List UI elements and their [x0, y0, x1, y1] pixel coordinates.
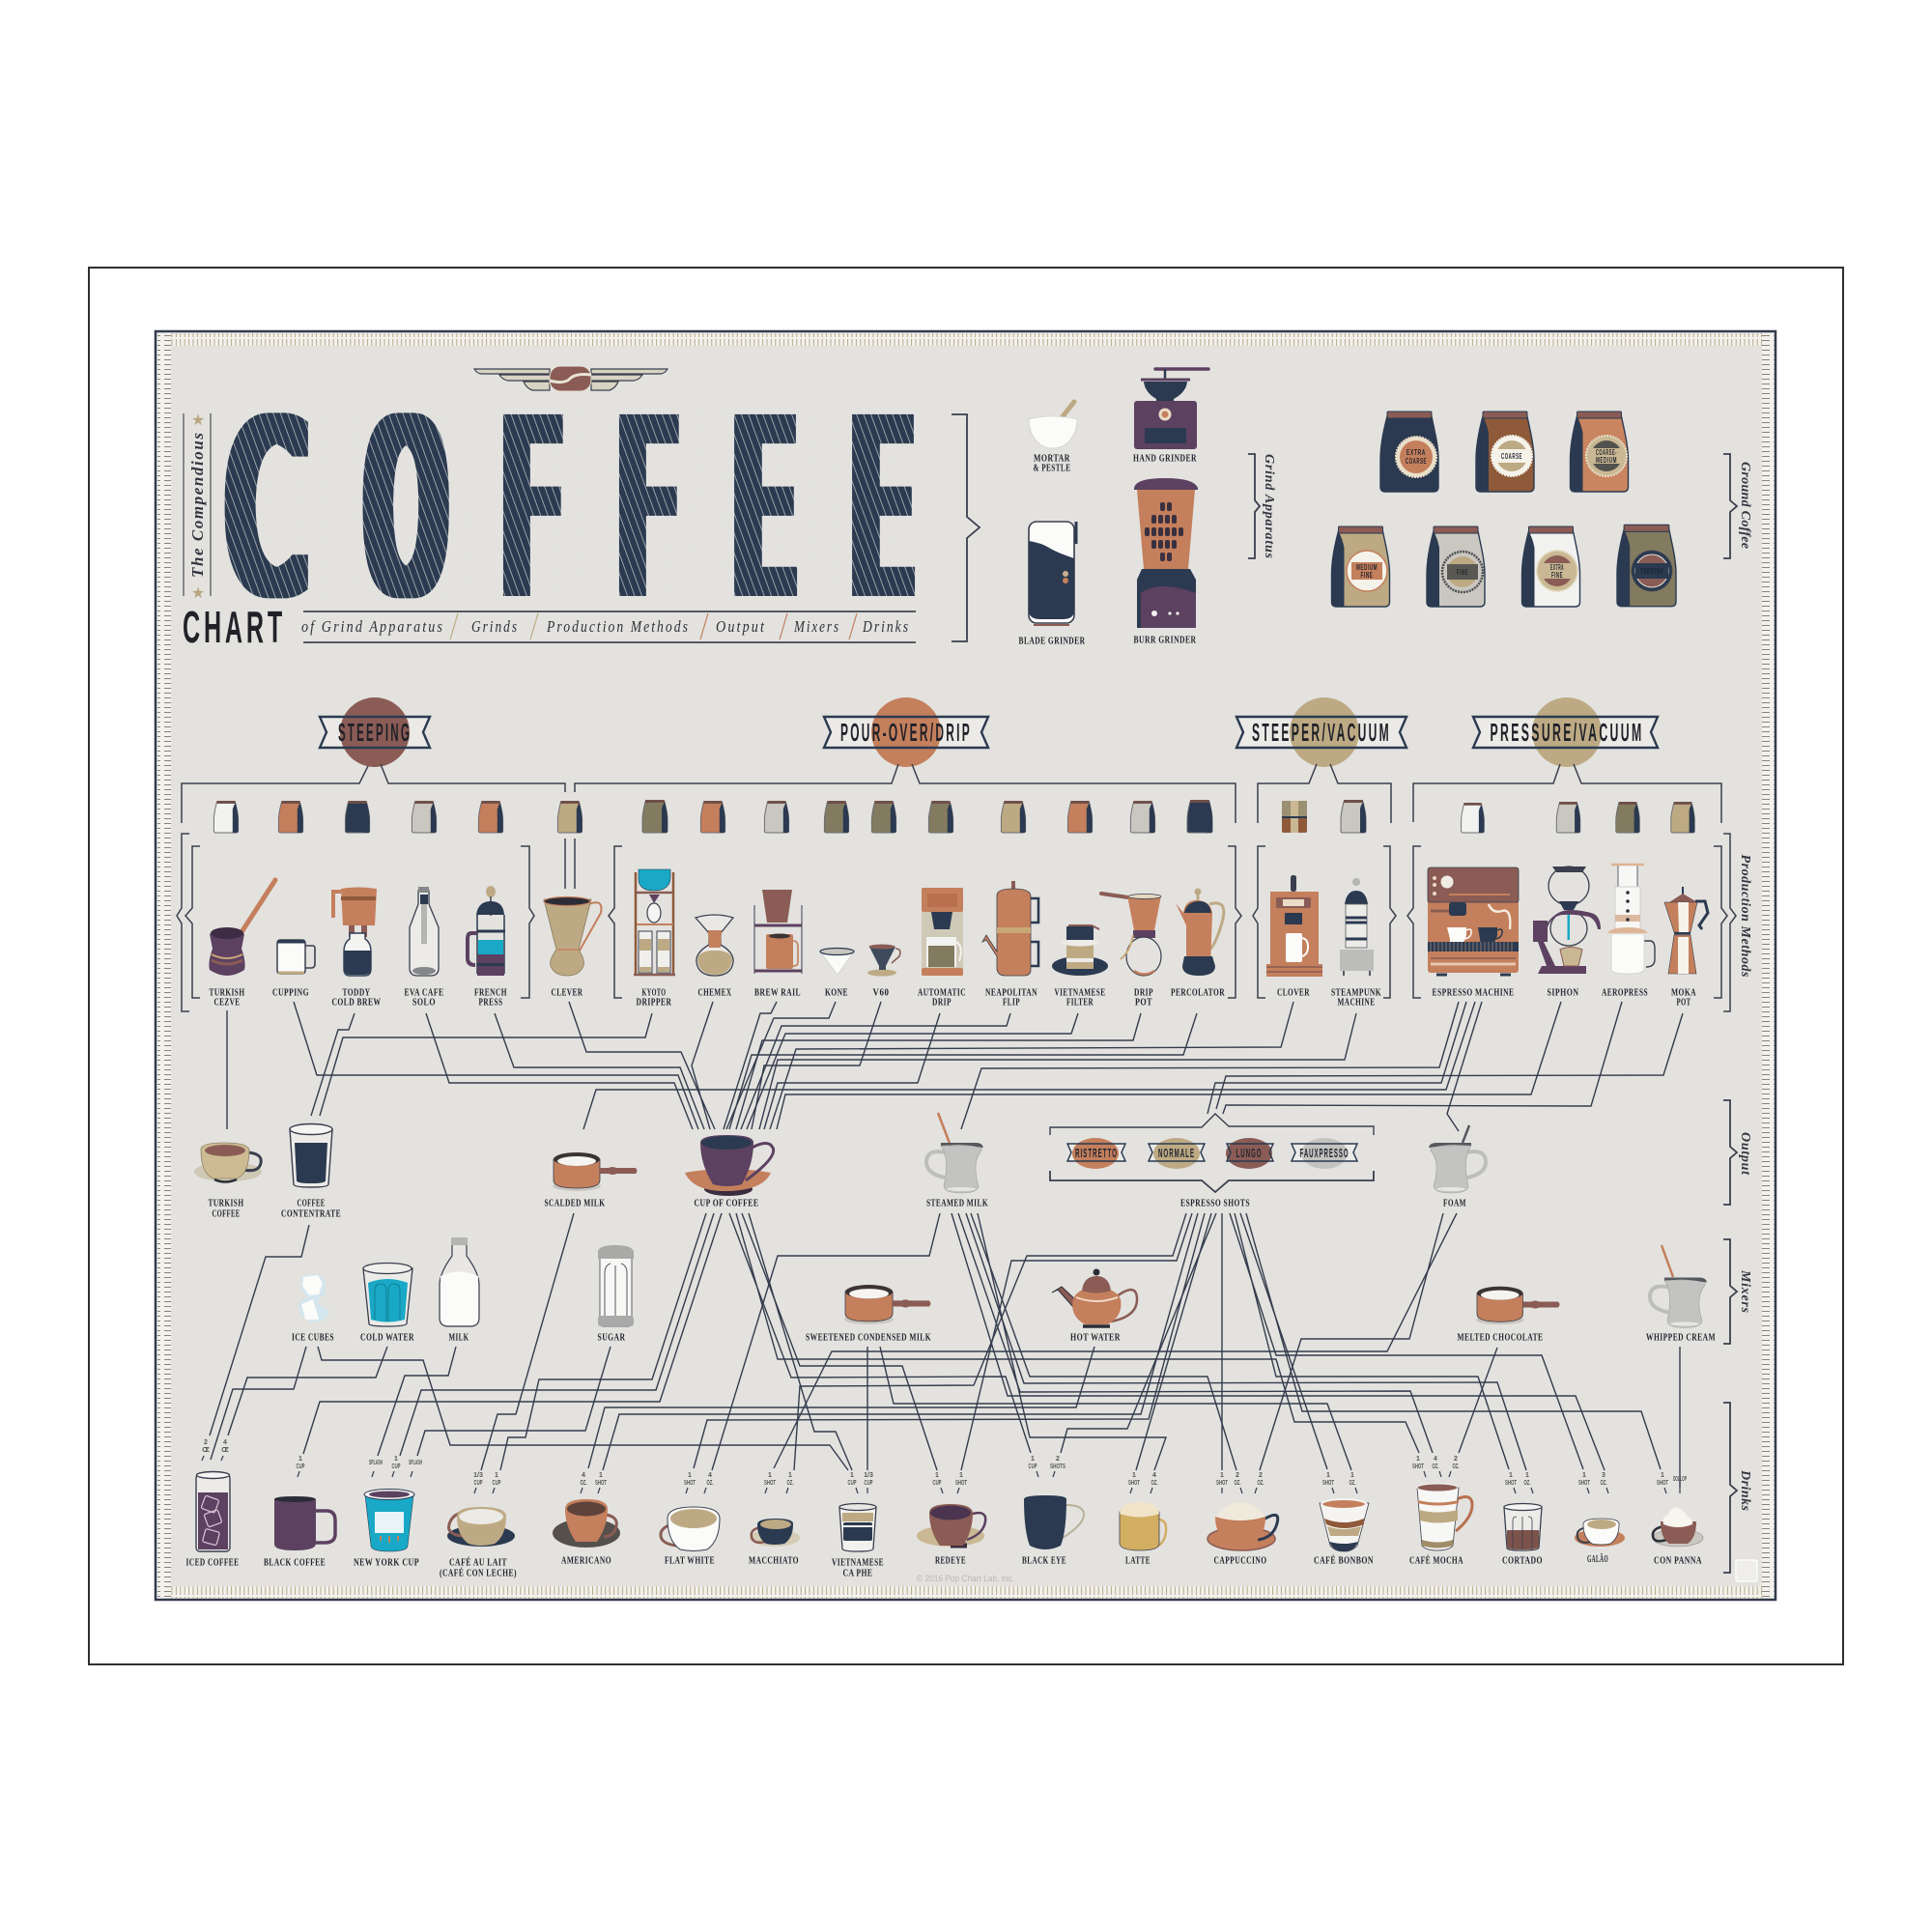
drink: cafe mocha	[1409, 1484, 1472, 1567]
amount labels: CUP	[933, 1480, 942, 1487]
icon: whipped cream: WHIPPED CREAM	[1646, 1333, 1716, 1343]
icon: eva cafe solo	[404, 887, 444, 1009]
amount labels: OZ.	[1453, 1463, 1460, 1470]
icon: turkish cezve: TURKISH	[209, 987, 245, 999]
icon: blade grinder	[1018, 522, 1086, 647]
icon: steampunk machine: MACHINE	[1337, 997, 1376, 1009]
icon: automatic drip: DRIP	[932, 997, 952, 1009]
text: DOLLOP	[1673, 1476, 1687, 1483]
title: COFFEE: E	[728, 359, 801, 662]
outer frame	[89, 268, 1843, 1664]
drink: vietnamese ca phe	[832, 1503, 884, 1578]
icon: espresso machine: ESPRESSO MACHINE	[1432, 987, 1515, 999]
title: COFFEE: C	[222, 377, 312, 644]
icon: hand grinder	[1133, 369, 1208, 464]
drink: flat white: FLAT WHITE	[665, 1555, 715, 1567]
icon: turkish cezve: CEZVE	[214, 997, 240, 1009]
bracket: ground coffee	[1723, 454, 1752, 558]
amount labels: 2	[1259, 1472, 1263, 1479]
heading: steeping: STEEPING	[338, 718, 412, 747]
connector lines: production methods to outputs	[227, 1002, 1683, 1131]
amount labels: 1	[768, 1472, 772, 1479]
title: CHART: CHART	[183, 602, 286, 652]
icon: brew rail: BREW RAIL	[754, 987, 801, 999]
icon: coffee concentrate: CONTENTRATE	[281, 1209, 341, 1219]
icon: clover machine	[1266, 875, 1322, 999]
amount labels: 2	[1056, 1456, 1060, 1463]
icon: neapolitan flip: FLIP	[1003, 997, 1020, 1009]
icon: cold water: COLD WATER	[360, 1333, 414, 1343]
amount labels: 4	[582, 1472, 585, 1479]
icon: turkish coffee	[194, 1143, 262, 1219]
amount labels: 2	[1454, 1456, 1458, 1463]
icon: kyoto dripper: KYOTO	[641, 987, 667, 999]
icon: french press	[468, 886, 507, 1009]
amount labels: 1	[298, 1456, 302, 1463]
icon: sweetened condensed milk	[806, 1285, 931, 1343]
amount labels: CUP	[392, 1463, 401, 1470]
drink: cortado: CORTADO	[1502, 1555, 1543, 1567]
drink: redeye: REDEYE	[935, 1555, 966, 1567]
icon: hot water teapot: HOT WATER	[1070, 1333, 1121, 1343]
icon: kone filter: KONE	[825, 987, 848, 999]
amount labels: 1	[1525, 1472, 1529, 1479]
icon: kone filter	[820, 949, 854, 999]
bag: medium fine	[1331, 526, 1389, 607]
drink: cappuccino	[1208, 1502, 1278, 1567]
side label: production methods: Production Methods	[1738, 854, 1752, 978]
drink: cafe au lait: (CAFÉ CON LECHE)	[440, 1567, 517, 1578]
icon: turkish cezve	[209, 880, 275, 1009]
drink: americano: AMERICANO	[561, 1555, 611, 1567]
icon: clever dripper: CLEVER	[551, 987, 583, 999]
drink: vietnamese ca phe: VIETNAMESE	[832, 1557, 884, 1569]
icon: espresso machine	[1428, 867, 1519, 999]
amount labels: 4	[1434, 1456, 1437, 1463]
title: COFFEE: F	[613, 359, 684, 662]
title: COFFEE: E	[846, 359, 919, 662]
icon: vietnamese filter: FILTER	[1066, 997, 1094, 1009]
icon: automatic drip: AUTOMATIC	[918, 987, 966, 999]
icon: foam	[1429, 1125, 1486, 1209]
amount labels: OZ.	[221, 1447, 229, 1454]
bag: extra fine: EXTRA	[1550, 563, 1564, 572]
amount labels: SPLASH	[409, 1460, 422, 1466]
drink: cafe mocha: CAFÉ MOCHA	[1409, 1555, 1463, 1567]
amount labels: 1/3	[473, 1472, 483, 1479]
amount labels: 1/3	[864, 1472, 873, 1479]
icon: toddy cold brew: TODDY	[342, 987, 371, 999]
icon: milk bottle: MILK	[448, 1333, 469, 1343]
icon: burr grinder	[1134, 478, 1198, 645]
bag: medium fine: MEDIUM	[1356, 563, 1378, 572]
icon: steampunk machine: STEAMPUNK	[1331, 987, 1381, 999]
amount labels: 1	[788, 1472, 792, 1479]
subtitle strip: Drinks	[862, 617, 910, 636]
drink: cafe au lait: CAFÉ AU LAIT	[449, 1557, 507, 1569]
subtitle strip: Production Methods	[546, 617, 690, 636]
amount labels: OZ.	[1432, 1463, 1439, 1470]
icon: coffee concentrate: COFFEE	[298, 1198, 325, 1209]
icon: hand grinder: HAND GRINDER	[1133, 454, 1197, 464]
title: COFFEE: F	[497, 359, 568, 662]
bag: turkish: TURKISH	[1640, 567, 1663, 576]
icon: moka pot: POT	[1677, 997, 1690, 1009]
amount labels: OZ.	[1151, 1480, 1158, 1487]
amount labels: SHOT	[955, 1480, 967, 1487]
bag: coarse: COARSE	[1501, 452, 1522, 461]
amount labels: SHOT	[1578, 1480, 1590, 1487]
amount labels: SHOT	[1657, 1480, 1668, 1487]
logo: winged coffee bean	[474, 366, 668, 391]
icon: siphon: SIPHON	[1548, 987, 1579, 999]
icon: steamed milk: STEAMED MILK	[926, 1198, 988, 1209]
drink: macchiato: MACCHIATO	[749, 1555, 799, 1567]
drink: iced coffee	[185, 1472, 240, 1569]
drink: iced coffee: ICED COFFEE	[185, 1557, 240, 1569]
icon: foam: FOAM	[1443, 1198, 1466, 1209]
icon: cup of coffee	[685, 1135, 774, 1209]
panel: espresso shots	[1050, 1114, 1374, 1209]
drink: black coffee	[264, 1496, 335, 1569]
amount labels: OZ.	[1524, 1480, 1531, 1487]
icon: eva cafe solo: SOLO	[412, 997, 436, 1009]
amount labels: 1	[1220, 1472, 1224, 1479]
amount labels: SHOT	[1128, 1480, 1140, 1487]
drink: black eye: BLACK EYE	[1022, 1555, 1066, 1567]
drink: cortado	[1502, 1503, 1543, 1567]
icon: sugar shaker	[597, 1245, 634, 1343]
amount labels: 1	[688, 1472, 692, 1479]
bracket: grind apparatus	[1248, 454, 1276, 559]
amount labels: 2	[204, 1439, 208, 1446]
icon: eva cafe solo: EVA CAFE	[404, 987, 444, 999]
icon: clover machine: CLOVER	[1277, 987, 1310, 999]
amount labels: OZ.	[580, 1480, 587, 1487]
title: The Compendious	[184, 411, 211, 602]
amount labels: 1	[1350, 1472, 1354, 1479]
amount labels: OZ.	[707, 1480, 714, 1487]
heading: pour-over drip: POUR-OVER/DRIP	[840, 718, 972, 747]
icon: aeropress: AEROPRESS	[1602, 987, 1648, 999]
amount ticks	[202, 1456, 1680, 1493]
icon: melted chocolate	[1457, 1287, 1560, 1343]
amount labels	[202, 1439, 1687, 1487]
amount labels: SHOT	[1216, 1480, 1228, 1487]
icon: kyoto dripper	[634, 869, 675, 1009]
bag: fine: FINE	[1457, 568, 1468, 577]
title bracket	[952, 414, 980, 641]
icon: steampunk machine	[1331, 878, 1381, 1009]
title: The Compendious: ★	[191, 583, 205, 602]
amount labels: SHOT	[684, 1480, 696, 1487]
icon: french press: PRESS	[479, 997, 502, 1009]
drink: new york cup	[354, 1490, 419, 1569]
icon: moka pot: MOKA	[1671, 987, 1696, 999]
amount labels: SHOT	[1412, 1463, 1424, 1470]
bag: extra coarse: COARSE	[1406, 457, 1427, 466]
bag: extra coarse	[1380, 412, 1438, 492]
drink: cafe bonbon	[1314, 1499, 1374, 1567]
icon: blade grinder: BLADE GRINDER	[1018, 636, 1086, 647]
icon: sweetened condensed milk: SWEETENED CONDENSED MILK	[806, 1333, 931, 1343]
bag: coarse-medium: COARSE-	[1596, 448, 1617, 457]
amount labels: OZ.	[1600, 1480, 1607, 1487]
amount labels: SHOT	[595, 1480, 607, 1487]
icon: v60	[867, 945, 900, 999]
icon: brew rail	[754, 890, 802, 999]
amount labels: 1	[495, 1472, 498, 1479]
side label: mixers: Mixers	[1738, 1269, 1752, 1314]
drink: con panna	[1653, 1507, 1703, 1567]
amount labels: OZ.	[1349, 1480, 1356, 1487]
icon: mortar and pestle: & PESTLE	[1034, 464, 1070, 473]
icon: percolator: PERCOLATOR	[1171, 987, 1225, 999]
drink: latte: LATTE	[1125, 1555, 1151, 1567]
grind bag row	[213, 800, 1694, 833]
category connectors	[182, 764, 1721, 889]
title: The Compendious: ★	[191, 411, 205, 429]
amount labels: SHOT	[764, 1480, 776, 1487]
production method brackets	[177, 834, 1736, 1011]
subtitle strip: Mixers	[793, 617, 840, 636]
icon: sugar shaker: SUGAR	[597, 1333, 626, 1343]
amount labels: SHOT	[1322, 1480, 1334, 1487]
amount labels: SHOT	[1505, 1480, 1517, 1487]
icon: burr grinder: BURR GRINDER	[1134, 636, 1197, 645]
icon: toddy cold brew: COLD BREW	[332, 997, 381, 1009]
bag: coarse-medium	[1571, 412, 1629, 492]
bag: medium fine: FINE	[1360, 571, 1374, 580]
icon: cupping mug	[272, 940, 315, 999]
bag: fine	[1427, 526, 1485, 607]
heading: steeper vacuum	[1236, 697, 1406, 767]
drink: con panna: CON PANNA	[1654, 1555, 1702, 1567]
bag: extra fine	[1522, 526, 1580, 607]
side label: drinks	[1723, 1403, 1752, 1573]
amount labels: 1	[1582, 1472, 1586, 1479]
amount labels: 1	[935, 1472, 939, 1479]
amount labels: 2	[1236, 1472, 1239, 1479]
amount labels: OZ.	[1235, 1480, 1241, 1487]
icon: automatic drip	[918, 888, 966, 1009]
icon: ice cubes	[292, 1273, 334, 1343]
icon: cup of coffee: CUP OF COFFEE	[694, 1198, 759, 1209]
heading: pressure vacuum	[1473, 697, 1658, 767]
bag: extra fine: FINE	[1551, 571, 1563, 580]
drink: macchiato	[749, 1519, 800, 1567]
icon: melted chocolate: MELTED CHOCOLATE	[1457, 1333, 1544, 1343]
amount labels: 4	[708, 1472, 712, 1479]
connector lines: outputs and mixers to drinks	[210, 1213, 1680, 1488]
amount labels: SPLASH	[369, 1460, 383, 1466]
side label: output: Output	[1738, 1132, 1752, 1176]
amount labels: 1	[599, 1472, 603, 1479]
icon: chemex	[696, 915, 733, 999]
amount labels: CUP	[848, 1480, 857, 1487]
drink: galao	[1575, 1519, 1625, 1565]
bag: coarse	[1476, 412, 1534, 492]
icon: steamed milk	[926, 1113, 988, 1209]
icon: clever dripper	[544, 896, 601, 999]
icon: v60: V60	[873, 987, 889, 999]
bag: turkish	[1617, 525, 1676, 607]
poster panel	[156, 331, 1776, 1600]
panel: espresso shots: NORMALE	[1158, 1146, 1195, 1160]
icon: drip pot	[1101, 894, 1161, 1009]
amount labels: 1	[1132, 1472, 1136, 1479]
heading: pressure vacuum: PRESSURE/VACUUM	[1490, 718, 1644, 747]
heading: steeping	[320, 697, 430, 767]
subtitle strip	[301, 611, 916, 642]
drink: new york cup: NEW YORK CUP	[354, 1557, 419, 1569]
icon: siphon	[1533, 867, 1601, 999]
drink: redeye	[917, 1504, 985, 1567]
amount labels: 1	[850, 1472, 854, 1479]
icon: turkish coffee: COFFEE	[213, 1209, 240, 1219]
panel: espresso shots: RISTRETTO	[1075, 1146, 1118, 1160]
drink: latte	[1120, 1502, 1166, 1567]
amount labels: 3	[1602, 1472, 1605, 1479]
publisher logo box	[1736, 1560, 1757, 1581]
icon: whipped cream	[1646, 1245, 1716, 1343]
amount labels: CUP	[864, 1480, 873, 1487]
amount labels: OZ.	[1258, 1480, 1264, 1487]
bag: coarse-medium: MEDIUM	[1596, 456, 1617, 465]
drink: flat white	[661, 1507, 720, 1567]
icon: scalded milk: SCALDED MILK	[545, 1198, 605, 1209]
bracket: ground coffee: Ground Coffee	[1738, 462, 1752, 549]
icon: drip pot: POT	[1135, 997, 1152, 1009]
drink: black coffee: BLACK COFFEE	[264, 1557, 326, 1569]
side label: mixers	[1723, 1239, 1752, 1344]
amount labels: CUP	[493, 1480, 501, 1487]
copyright: © 2016 Pop Chart Lab, Inc.	[917, 1574, 1014, 1583]
amount labels: 1	[1661, 1472, 1664, 1479]
heading: pour-over drip	[824, 697, 988, 767]
amount labels: 1	[1416, 1456, 1420, 1463]
title: COFFEE	[217, 359, 923, 662]
icon: coffee concentrate	[281, 1124, 341, 1219]
icon: french press: FRENCH	[474, 987, 507, 999]
amount labels: OZ.	[202, 1447, 210, 1454]
icon: hot water teapot	[1052, 1269, 1137, 1343]
amount labels: CUP	[473, 1480, 483, 1487]
icon: kyoto dripper: DRIPPER	[636, 997, 672, 1009]
icon: moka pot	[1664, 887, 1708, 1009]
subtitle strip: of Grind Apparatus	[301, 617, 444, 636]
amount labels: 1	[959, 1472, 963, 1479]
amount labels: 4	[1152, 1472, 1156, 1479]
drink: americano	[553, 1499, 620, 1567]
panel: espresso shots: LUNGO	[1236, 1146, 1262, 1160]
amount labels: SHOTS	[1050, 1463, 1065, 1470]
drink: black eye	[1022, 1495, 1084, 1567]
icon: ice cubes: ICE CUBES	[292, 1333, 334, 1343]
icon: cupping mug: CUPPING	[272, 987, 309, 999]
icon: chemex: CHEMEX	[697, 987, 732, 999]
amount labels: OZ.	[786, 1480, 794, 1487]
side label: output	[1723, 1100, 1752, 1205]
icon: cold water	[360, 1264, 414, 1343]
icon: mortar and pestle: MORTAR	[1034, 454, 1070, 464]
bracket: grind apparatus: Grind Apparatus	[1262, 454, 1276, 559]
amount labels: 4	[223, 1439, 227, 1446]
icon: toddy cold brew	[332, 887, 381, 1009]
icon: milk bottle	[440, 1237, 479, 1343]
amount labels: 1	[1031, 1456, 1035, 1463]
drink: cappuccino: CAPPUCCINO	[1213, 1555, 1267, 1567]
bag: extra coarse: EXTRA	[1406, 448, 1426, 457]
icon: neapolitan flip	[982, 881, 1038, 1009]
amount labels: 1	[1326, 1472, 1330, 1479]
icon: vietnamese filter: VIETNAMESE	[1055, 987, 1105, 999]
amount labels: CUP	[1028, 1463, 1037, 1470]
icon: vietnamese filter	[1052, 925, 1108, 1009]
subtitle strip: Grinds	[471, 617, 519, 636]
drink: cafe bonbon: CAFÉ BONBON	[1314, 1555, 1374, 1567]
amount labels: 1	[1509, 1472, 1513, 1479]
title: COFFEE: O	[362, 376, 449, 643]
drink: vietnamese ca phe: CA PHE	[842, 1569, 873, 1578]
icon: scalded milk	[545, 1152, 638, 1209]
amount labels: CUP	[296, 1463, 305, 1470]
icon: turkish coffee: TURKISH	[209, 1198, 243, 1209]
subtitle strip: Output	[716, 617, 766, 636]
icon: percolator	[1171, 889, 1225, 999]
icon: aeropress	[1602, 865, 1655, 999]
amount labels: 1	[394, 1456, 398, 1463]
title: The Compendious: The Compendious	[188, 433, 207, 578]
drink: galao: GALÃO	[1587, 1553, 1608, 1565]
icon: mortar and pestle	[1029, 402, 1077, 473]
icon: drip pot: DRIP	[1134, 987, 1153, 999]
panel: espresso shots: FAUXPRESSO	[1300, 1146, 1349, 1160]
side label: drinks: Drinks	[1738, 1469, 1752, 1512]
drink: cafe au lait	[440, 1507, 517, 1578]
icon: neapolitan flip: NEAPOLITAN	[985, 987, 1037, 999]
panel: espresso shots: ESPRESSO SHOTS	[1180, 1198, 1250, 1209]
heading: steeper vacuum: STEEPER/VACUUM	[1252, 718, 1391, 747]
